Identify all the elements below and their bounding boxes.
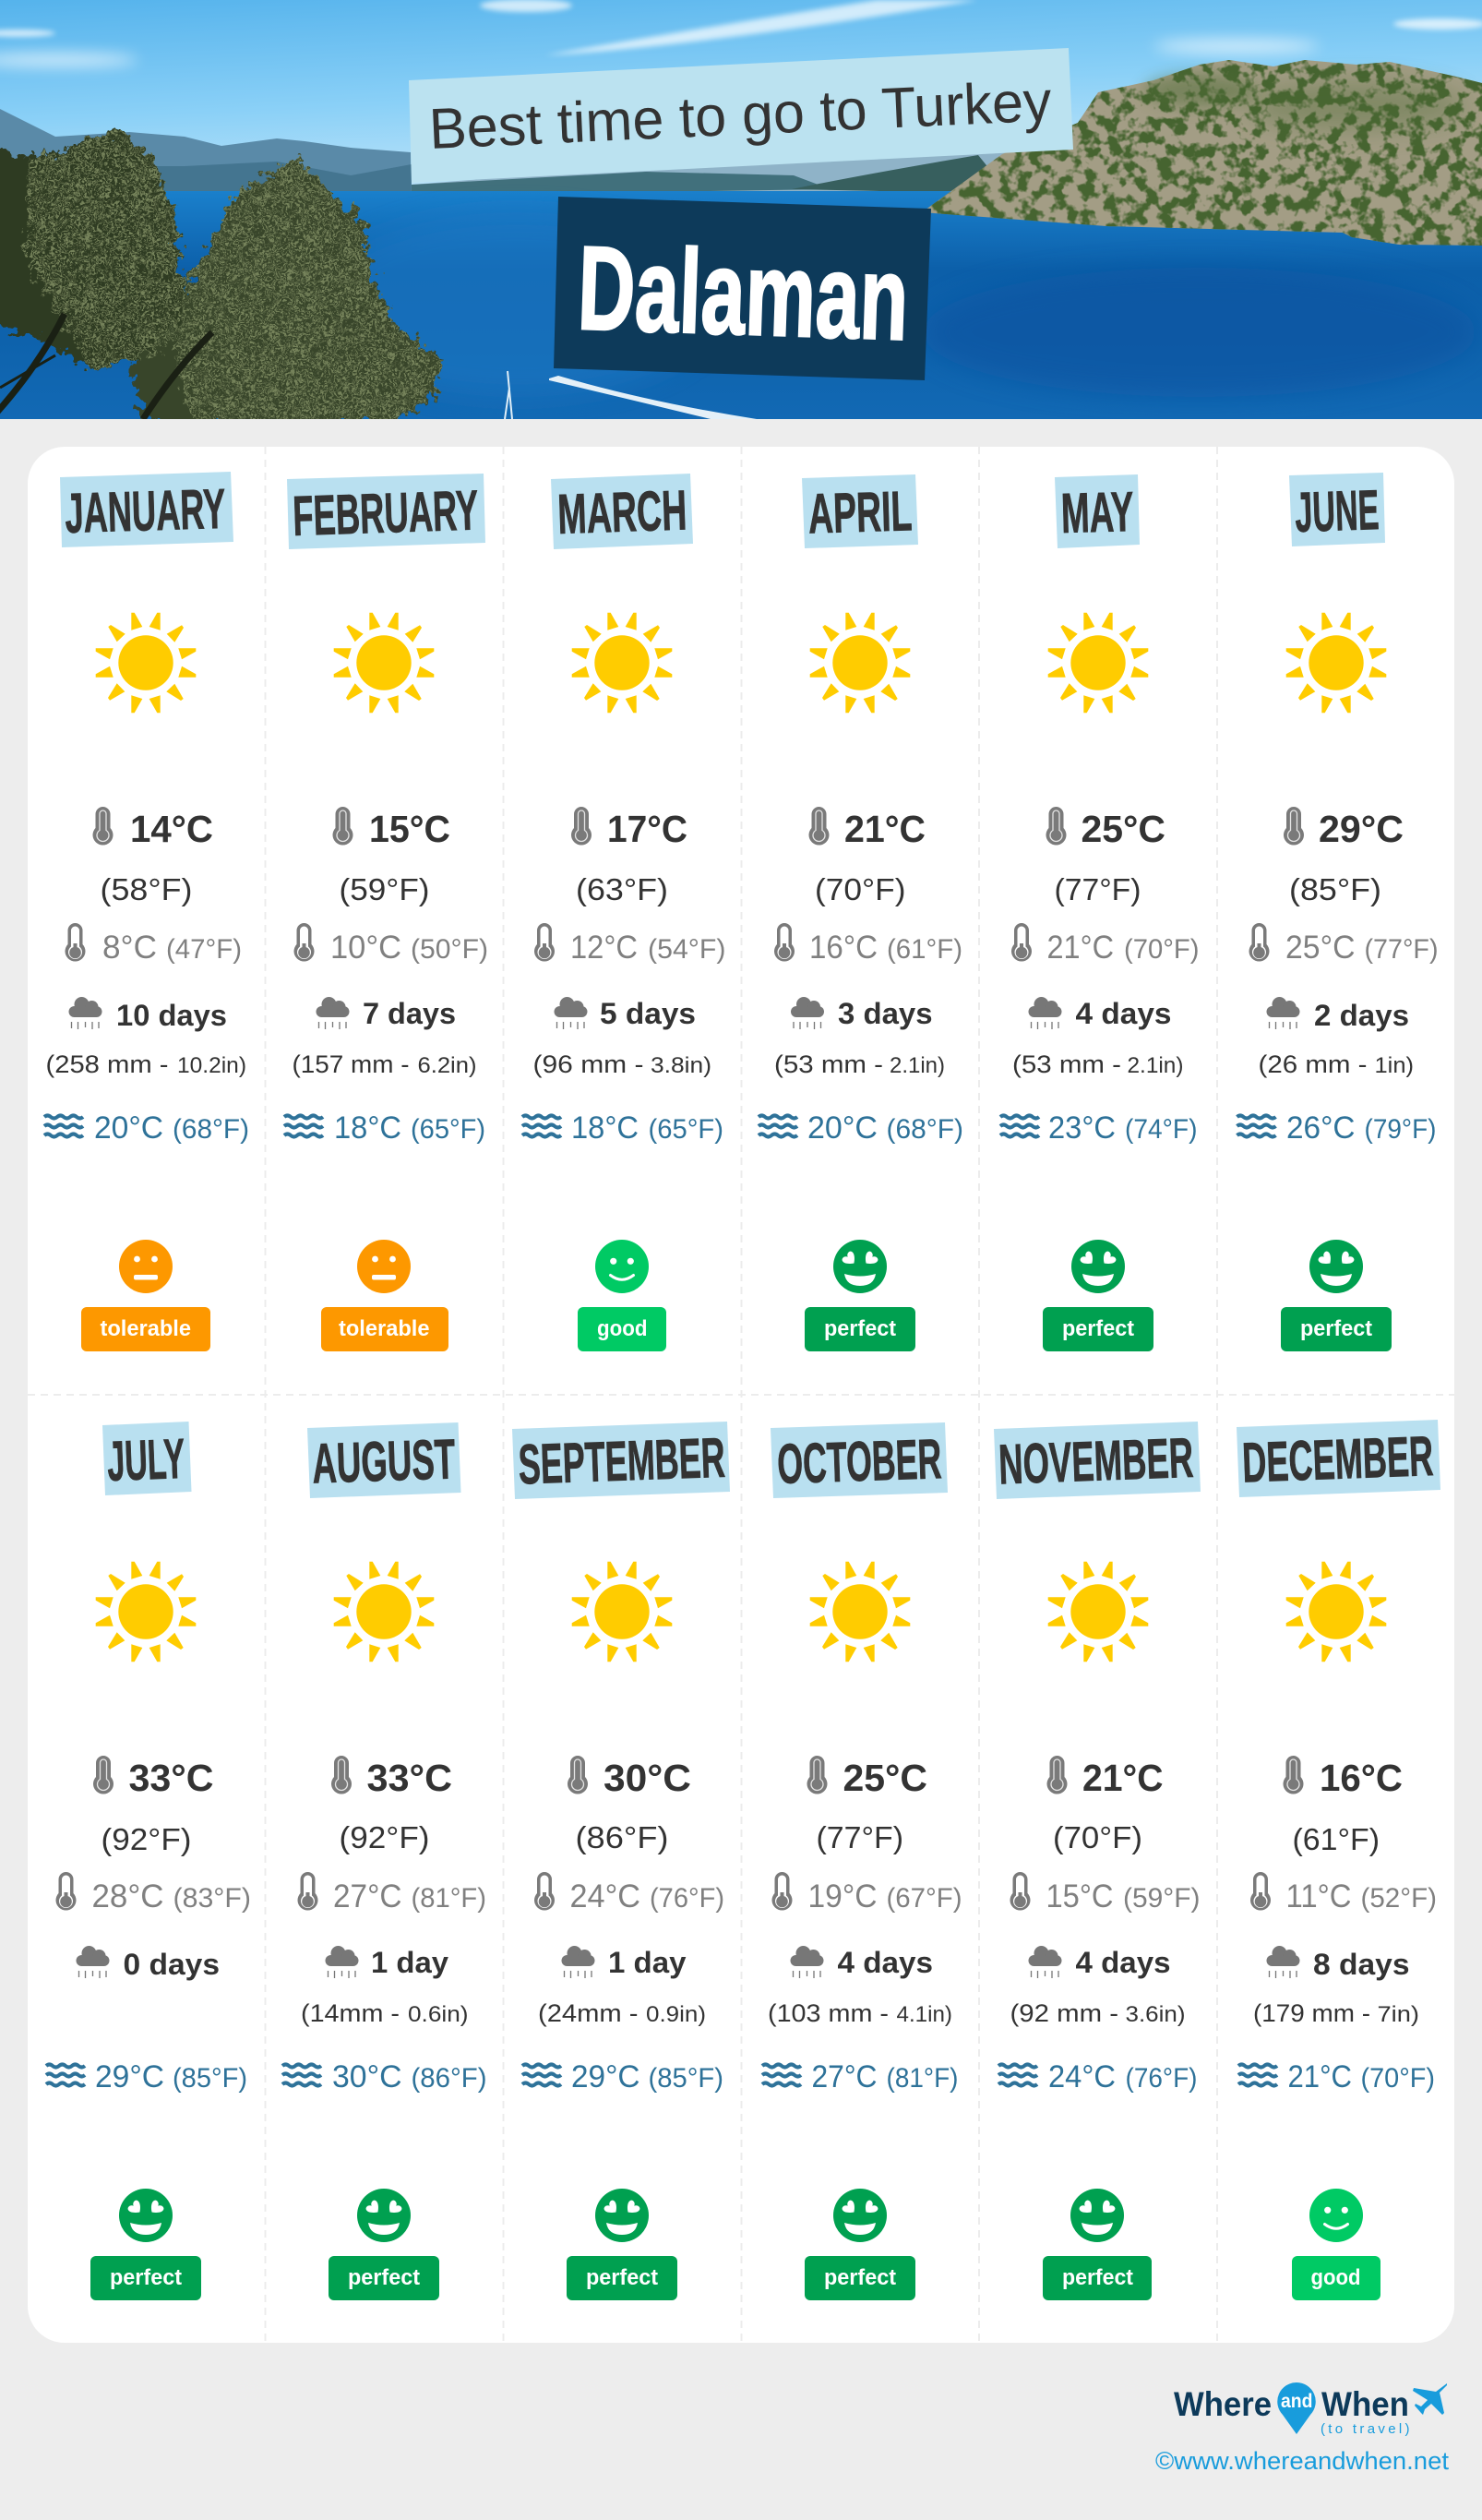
sea temperature: (65°F) [648,1114,723,1145]
month: June [1237,473,1438,1351]
rain days [1028,997,1172,1030]
low temperature: 21°C [1046,930,1114,966]
rating: perfect: perfect [348,2265,420,2290]
low temperature: 10°C [330,930,401,966]
calendar card [28,447,1454,2343]
icon: map pin: and [1281,2391,1312,2412]
sea temperature [998,2059,1198,2094]
rainfall: (157 mm - [292,1050,410,1078]
rain days [325,1946,448,1979]
low temperature: (83°F) [173,1883,251,1914]
high temperature [331,1756,452,1799]
high temperature: 25°C [843,1757,927,1799]
rain days [1266,1946,1410,1981]
rating: perfect [805,1240,915,1351]
high temperature [568,1756,691,1799]
rating: tolerable [321,1240,448,1351]
high temperature [807,1756,927,1799]
icon: sun [572,1562,672,1662]
rainfall: (179 mm - [1253,1999,1370,2027]
icon: sun [572,613,672,713]
rating: perfect: perfect [824,2265,896,2290]
icon: sun [810,613,910,713]
month: March [522,474,725,1351]
rainfall: 3.8in) [651,1053,711,1078]
label: October [771,1422,948,1498]
icon: sun [96,1562,196,1662]
sea temperature: (68°F) [173,1114,249,1145]
sea temperature: 29°C [571,2059,640,2094]
rain days [790,1946,933,1979]
rating: tolerable: tolerable [100,1316,191,1341]
rainfall: 2.1in) [1128,1053,1183,1078]
high temperature: 29°C [1319,808,1404,850]
label: July [102,1422,192,1495]
rating: perfect: perfect [1062,2265,1133,2290]
sea temperature: (70°F) [1360,2063,1435,2094]
footer logo: Where and When: Where [1174,2385,1272,2423]
footer logo: Where and When: (to travel) [1321,2421,1410,2437]
low temperature [55,1872,251,1914]
low temperature: (77°F) [1364,934,1438,965]
high temperature [92,807,213,850]
sea temperature: (85°F) [173,2063,247,2094]
website credit: ©www.whereandwhen.net [1155,2447,1449,2475]
low temperature [1250,1872,1437,1914]
rain days: 2 days [1314,999,1409,1032]
icon: sun [1286,613,1386,713]
sea temperature [759,1110,963,1146]
low temperature [1249,923,1438,966]
icon: sun [1048,613,1148,713]
label: October: OCTOBER [776,1427,942,1495]
rainfall [774,1050,945,1078]
high temperature: 14°C [130,808,213,850]
sea temperature: 20°C [807,1110,878,1146]
sea temperature: 29°C [95,2059,164,2094]
high temperature [332,807,450,850]
low temperature: 12°C [570,930,638,966]
sea temperature [522,1110,723,1146]
low temperature: 15°C [1046,1878,1113,1914]
rating: good: good [1310,2265,1360,2290]
sea temperature: 30°C [332,2059,402,2094]
rating: perfect [567,2189,677,2300]
sea temperature [1238,2059,1435,2094]
high temperature: 15°C [369,808,450,850]
rainfall: 7in) [1377,2002,1419,2027]
high temperature: 21°C [1082,1757,1163,1799]
rainfall [1012,1050,1183,1078]
sea temperature: (79°F) [1364,1114,1436,1145]
sea temperature [284,1110,485,1146]
low temperature: 28°C [92,1878,164,1914]
icon: sun [96,613,196,713]
rainfall [292,1050,476,1078]
label: January: JANUARY [64,477,226,545]
month: January [44,472,249,1351]
high temperature fahrenheit: (63°F) [576,872,668,906]
low temperature [534,923,725,966]
sea temperature: (76°F) [1126,2063,1198,2094]
rating: good: good [597,1316,648,1341]
low temperature: (47°F) [166,934,242,965]
rainfall: 1in) [1375,1053,1414,1078]
low temperature: (76°F) [650,1883,724,1914]
label: June [1289,473,1385,546]
label: September: SEPTEMBER [518,1426,726,1495]
rain days: 8 days [1313,1948,1410,1981]
header photo: bay with hills and trees [0,0,1482,425]
month: August [282,1422,487,2300]
city name banner [554,197,931,380]
rainfall: (92 mm - [1010,1999,1118,2027]
sea temperature: 18°C [334,1110,401,1146]
footer logo: Where and When [1174,2382,1447,2437]
label: March [551,474,693,549]
rating: perfect [1043,1240,1153,1351]
sea temperature [1000,1110,1198,1146]
rainfall: (103 mm - [768,1999,889,2027]
high temperature [1283,1756,1403,1799]
low temperature: 11°C [1286,1878,1351,1914]
high temperature fahrenheit: (92°F) [340,1820,430,1854]
rating: good [578,1240,666,1351]
rainfall: (14mm - [301,1999,400,2027]
high temperature fahrenheit: (61°F) [1292,1822,1380,1856]
label: February [287,474,485,549]
sea temperature: (68°F) [886,1114,963,1145]
label: March: MARCH [556,478,687,546]
label: May: MAY [1060,480,1134,545]
rain days: 0 days [124,1948,220,1981]
rating: perfect [1281,1240,1392,1351]
rainfall [538,1999,706,2027]
rainfall [46,1050,246,1078]
month: April [759,474,963,1351]
sea temperature: (86°F) [412,2063,487,2094]
rain days [561,1946,687,1979]
title banner [409,48,1073,183]
high temperature [1046,807,1165,850]
rain days: 7 days [363,997,456,1030]
label: August [307,1422,461,1498]
rainfall [1010,1999,1185,2027]
high temperature: 25°C [1082,808,1165,850]
label: June: JUNE [1294,478,1380,544]
sea temperature: 23°C [1048,1110,1116,1146]
high temperature fahrenheit: (70°F) [815,872,906,906]
low temperature: (61°F) [887,934,962,965]
high temperature [93,1756,214,1799]
label: February: FEBRUARY [292,478,479,547]
label: April: APRIL [807,479,913,545]
low temperature: 19°C [808,1878,877,1914]
low temperature: (67°F) [886,1883,962,1914]
low temperature: (54°F) [648,934,725,965]
city name banner: Dalaman [576,222,911,366]
rating: perfect: perfect [1062,1316,1134,1341]
icon: sun [1286,1562,1386,1662]
high temperature fahrenheit: (70°F) [1053,1820,1142,1854]
high temperature: 16°C [1320,1757,1403,1799]
rainfall: (24mm - [538,1999,639,2027]
high temperature: 17°C [607,808,687,850]
high temperature: 33°C [129,1757,214,1799]
rating: perfect [805,2189,915,2300]
month: October [762,1422,962,2300]
icon: airplane [1413,2383,1447,2415]
rating: perfect: perfect [110,2265,182,2290]
month: May [1000,474,1200,1351]
low temperature [1010,1872,1200,1914]
rainfall [533,1050,711,1078]
label: November [994,1422,1201,1499]
high temperature fahrenheit: (86°F) [576,1820,668,1854]
rain days: 5 days [600,997,696,1030]
sea temperature [1237,1110,1436,1146]
low temperature [534,1872,724,1914]
low temperature [774,923,962,966]
rain days [1266,997,1409,1032]
rain days [68,997,227,1032]
low temperature [65,923,242,966]
rating: perfect [1043,2189,1152,2300]
low temperature: 27°C [333,1878,402,1914]
rainfall: 6.2in) [417,1053,476,1078]
month: November [994,1422,1201,2300]
sea temperature: 18°C [571,1110,639,1146]
sea temperature [282,2059,487,2094]
sea temperature: (65°F) [411,1114,485,1145]
icon: map pin [1277,2382,1316,2434]
label: September [512,1422,730,1499]
rainfall: 3.6in) [1126,2002,1185,2027]
low temperature [293,923,488,966]
rating: good [1292,2189,1380,2300]
low temperature: (50°F) [411,934,488,965]
label: August: AUGUST [311,1427,456,1494]
rain days: 3 days [838,997,932,1030]
icon: sun [334,1562,434,1662]
rain days: 10 days [116,999,227,1032]
sea temperature: 27°C [812,2059,877,2094]
low temperature: 25°C [1285,930,1355,966]
rating: perfect [329,2189,439,2300]
icon: sun [1048,1562,1148,1662]
rating: perfect: perfect [1300,1316,1372,1341]
sea temperature: (85°F) [648,2063,723,2094]
icon: sun [334,613,434,713]
sea temperature [762,2059,958,2094]
label: April [802,474,918,548]
rain days [791,997,932,1030]
high temperature fahrenheit: (77°F) [816,1820,903,1854]
high temperature fahrenheit: (59°F) [340,872,430,906]
rainfall [301,1999,469,2027]
high temperature [1046,1756,1163,1799]
month: February [284,474,488,1351]
sea temperature: 24°C [1048,2059,1116,2094]
low temperature: (81°F) [412,1883,486,1914]
rainfall [1259,1050,1414,1078]
high temperature fahrenheit: (85°F) [1289,872,1381,906]
sea temperature [522,2059,723,2094]
rainfall: (258 mm - [46,1050,168,1078]
sea temperature: 26°C [1286,1110,1355,1146]
low temperature: 8°C [102,930,157,966]
rain days: 4 days [1076,1946,1170,1979]
high temperature fahrenheit: (58°F) [100,872,192,906]
sea temperature: (81°F) [886,2063,958,2094]
label: May [1055,474,1140,548]
rainfall: 2.1in) [890,1053,945,1078]
rating: perfect: perfect [586,2265,658,2290]
low temperature [1011,923,1200,966]
rain days: 1 day [608,1946,687,1979]
month: September [512,1422,730,2300]
rain days [1028,1946,1170,1979]
high temperature: 30°C [604,1757,691,1799]
month: July [46,1422,251,2300]
sea temperature: 20°C [94,1110,163,1146]
title banner: Best time to go to Turkey [428,69,1053,162]
rainfall [768,1999,952,2027]
rating: perfect [90,2189,201,2300]
rain days [316,997,456,1030]
high temperature: 33°C [367,1757,452,1799]
high temperature fahrenheit: (92°F) [102,1822,192,1856]
high temperature [808,807,926,850]
low temperature: (59°F) [1123,1883,1200,1914]
high temperature [571,807,687,850]
label: July: JULY [106,1427,185,1493]
sea temperature [46,2059,247,2094]
high temperature: 21°C [844,808,926,850]
sea temperature: 21°C [1288,2059,1352,2094]
rating: perfect: perfect [824,1316,896,1341]
label: November: NOVEMBER [998,1426,1194,1495]
sea temperature: (74°F) [1125,1114,1198,1145]
low temperature: (52°F) [1360,1883,1437,1914]
rain days: 4 days [1076,997,1172,1030]
rain days [76,1946,220,1981]
rainfall: 0.6in) [408,2002,469,2027]
footer logo: Where and When: When [1321,2385,1409,2423]
high temperature [1284,807,1404,850]
rainfall: (53 mm - [774,1050,883,1078]
rating: tolerable: tolerable [339,1316,430,1341]
rating: tolerable [81,1240,210,1351]
rainfall: 0.9in) [646,2002,706,2027]
sea temperature [44,1110,249,1146]
rainfall [1253,1999,1419,2027]
high temperature fahrenheit: (77°F) [1054,872,1141,906]
icon: sun [810,1562,910,1662]
rain days: 4 days [838,1946,933,1979]
rainfall: (26 mm - [1259,1050,1368,1078]
label: January [60,472,233,547]
low temperature [771,1872,962,1914]
low temperature: (70°F) [1124,934,1200,965]
month: December [1237,1420,1440,2300]
rainfall: (53 mm - [1012,1050,1121,1078]
low temperature: 24°C [570,1878,640,1914]
rain days [554,997,696,1030]
low temperature: 16°C [809,930,878,966]
rainfall: 10.2in) [177,1053,246,1078]
low temperature [297,1872,486,1914]
rainfall: (96 mm - [533,1050,644,1078]
rainfall: 4.1in) [897,2002,952,2027]
rain days: 1 day [371,1946,448,1979]
